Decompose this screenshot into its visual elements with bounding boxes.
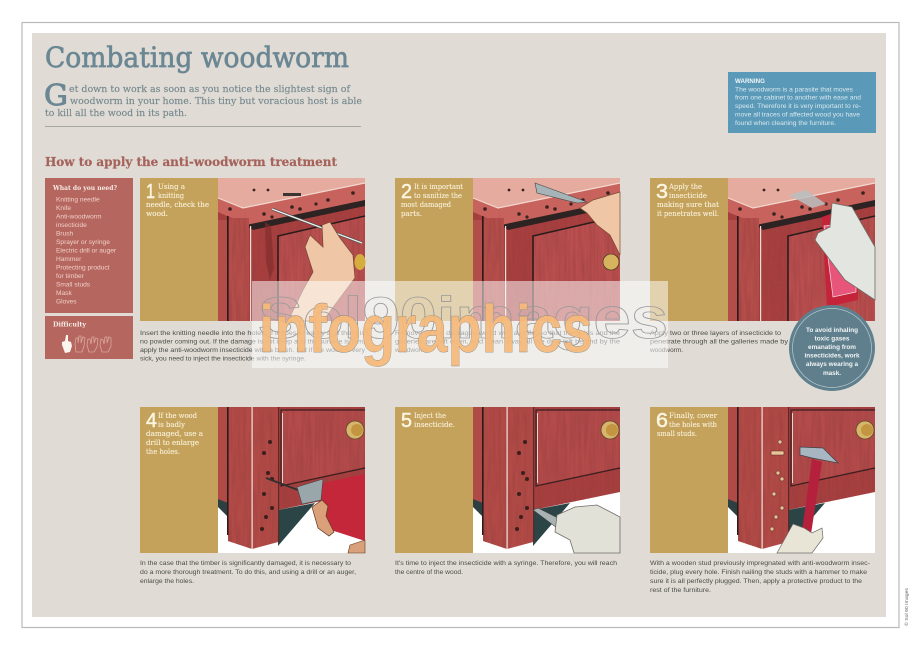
step 1: Using a	[158, 183, 185, 191]
warning box: WARNING	[735, 78, 765, 85]
step 2 description	[394, 330, 621, 354]
callout: wear a mask	[789, 305, 875, 391]
step 4 description: In the case that the timber is significantly damaged, it is necessary to	[140, 560, 352, 567]
step 4: If the wood	[158, 412, 198, 420]
step 6 description: With a wooden stud previously impregnated with anti-woodworm insec-	[650, 560, 870, 567]
step 2 description: woodworm.	[394, 347, 428, 354]
step 2: to sanitize the	[414, 192, 462, 200]
panel: what do you need: What do you need?	[52, 184, 117, 192]
step 3: making sure that	[657, 201, 719, 209]
step 1 description	[140, 330, 366, 362]
panel: what do you need: insecticide	[56, 222, 87, 229]
watermark: Sol90images	[258, 286, 668, 351]
step 1 description: no powder coming out. If the damage is not deep and the surface is firm,	[140, 338, 365, 346]
step 3 description: woodworm.	[649, 347, 683, 354]
step 1: knitting	[158, 192, 184, 200]
intro text	[44, 78, 362, 119]
intro text: to kill all the wood in its path.	[45, 108, 187, 119]
step 6 description: rest of the furniture.	[650, 587, 711, 594]
step 3: Apply the	[668, 183, 702, 191]
step 3 description	[649, 330, 789, 354]
warning box: from one cabinet to another with ease and	[735, 94, 861, 102]
illustration: drilling holes	[218, 407, 365, 553]
intro text: et down to work as soon as you notice the slightest sign of	[69, 84, 351, 95]
step 5 description: the centre of the wood.	[395, 569, 463, 576]
step 6	[650, 407, 875, 594]
panel: difficulty	[45, 316, 133, 359]
step 1 description: Insert the knitting needle into the holes. If it goes in easily and there is	[140, 330, 365, 337]
step 3 description: Apply two or three layers of insecticide to	[650, 330, 782, 337]
step 4 description	[140, 560, 356, 585]
illustration: sanitizing with knife	[473, 178, 620, 321]
warning box: found when cleaning the furniture.	[735, 120, 836, 127]
step 1 description: apply the anti-woodworm insecticide with a brush. But if the wood is very	[140, 347, 366, 354]
credit: © Sol 90 Images	[903, 587, 910, 626]
callout: wear a mask: mask.	[823, 370, 841, 377]
step 2: It is important	[414, 183, 463, 191]
callout: wear a mask: always wearing a	[806, 361, 859, 368]
step 3: it penetrates well.	[657, 210, 719, 218]
step 4	[140, 407, 365, 585]
step 6: 6	[656, 410, 668, 432]
illustration: hammering studs	[728, 407, 875, 553]
step 4 description: do a more thorough treatment. To do this, and using a drill or an auger,	[140, 569, 356, 576]
panel: what do you need: Anti-woodworm	[56, 214, 102, 220]
step 6 description: ticide, plug every hole. Finish nailing the studs with a hammer to make	[650, 569, 868, 576]
step 2 description: galleries are left open, and clean away all the dust left behind by the	[395, 338, 621, 346]
panel: what do you need: Knife	[56, 205, 71, 212]
illustration: needle checking wood	[218, 178, 366, 321]
warning box: The woodworm is a parasite that moves	[735, 86, 853, 94]
step 6: the holes with	[669, 421, 717, 429]
icon: difficulty hands	[62, 335, 111, 353]
panel: difficulty: Difficulty	[53, 320, 87, 328]
step 1 description: sick, you need to inject the insecticide with the syringe.	[140, 356, 306, 362]
intro text: woodworm in your home. This tiny but voracious host is able	[70, 96, 362, 107]
step 6: small studs.	[657, 430, 697, 438]
step 2	[394, 178, 621, 354]
callout: wear a mask: To avoid inhaling	[806, 327, 858, 334]
panel: what do you need: Hammer	[56, 256, 82, 263]
panel: what do you need: Mask	[56, 290, 72, 297]
step 6: Finally, cover	[669, 412, 718, 420]
step 5 description: It's time to inject the insecticide with a syringe. Therefore, you will reach	[395, 560, 618, 567]
step 3: 3	[656, 181, 668, 203]
intro text: G	[44, 78, 68, 112]
panel: what do you need: for timber	[56, 273, 85, 280]
panel: what do you need: Small studs	[56, 282, 91, 288]
step 3	[649, 178, 875, 354]
warning box: speed. Therefore it is very important to re-	[735, 103, 861, 110]
step 5	[395, 407, 620, 576]
panel: what do you need: Knitting needle	[56, 196, 100, 204]
step 1: wood.	[146, 210, 168, 218]
step 4: drill to enlarge	[146, 439, 199, 447]
step 4: 4	[146, 410, 157, 432]
step 2: 2	[401, 181, 412, 203]
step 3 description: penetrate through all the galleries made by	[650, 338, 789, 346]
panel: what do you need: Gloves	[56, 298, 77, 306]
step 5: 5	[401, 410, 412, 432]
step 2: parts.	[401, 210, 422, 218]
panel: what do you need	[45, 178, 133, 313]
callout: wear a mask: emanating from	[808, 344, 856, 351]
step 6 description	[650, 560, 870, 594]
step 4: the holes.	[146, 448, 180, 456]
panel: what do you need: Sprayer or syringe	[56, 239, 110, 246]
step 4: damaged, use a	[146, 430, 203, 438]
panel: what do you need: Electric drill or auger	[56, 248, 117, 254]
step 1: needle, check the	[146, 201, 209, 209]
warning box: move all traces of affected wood you have	[735, 112, 861, 118]
step 3: insecticide	[669, 192, 707, 200]
step 6 description: sure it is all perfectly plugged. Then, apply a protective product to the	[650, 578, 863, 585]
step 5: insecticide.	[414, 421, 455, 429]
step 5 description	[395, 560, 618, 576]
section heading: How to apply the anti-woodworm treatment	[45, 155, 337, 169]
panel: what do you need: Brush	[56, 230, 74, 238]
callout: wear a mask: toxic gases	[815, 336, 850, 342]
title: Combating woodworm	[45, 41, 349, 74]
step 1	[140, 178, 366, 362]
callout: wear a mask: insecticides, work	[804, 352, 860, 360]
step 5: Inject the	[414, 412, 446, 420]
step 2 description: Remove all the damaged wood with a knife, so that the holes and the	[395, 330, 621, 337]
warning box	[728, 72, 876, 133]
panel: what do you need: Protecting product	[56, 264, 110, 272]
illustration: spraying insecticide	[728, 178, 875, 321]
step 4: is badly	[158, 421, 185, 429]
step 4 description: enlarge the holes.	[140, 578, 194, 585]
illustration: injecting insecticide	[473, 407, 620, 553]
step 1: 1	[146, 181, 155, 203]
step 2: most damaged	[401, 201, 451, 209]
watermark: infographics	[259, 291, 593, 367]
